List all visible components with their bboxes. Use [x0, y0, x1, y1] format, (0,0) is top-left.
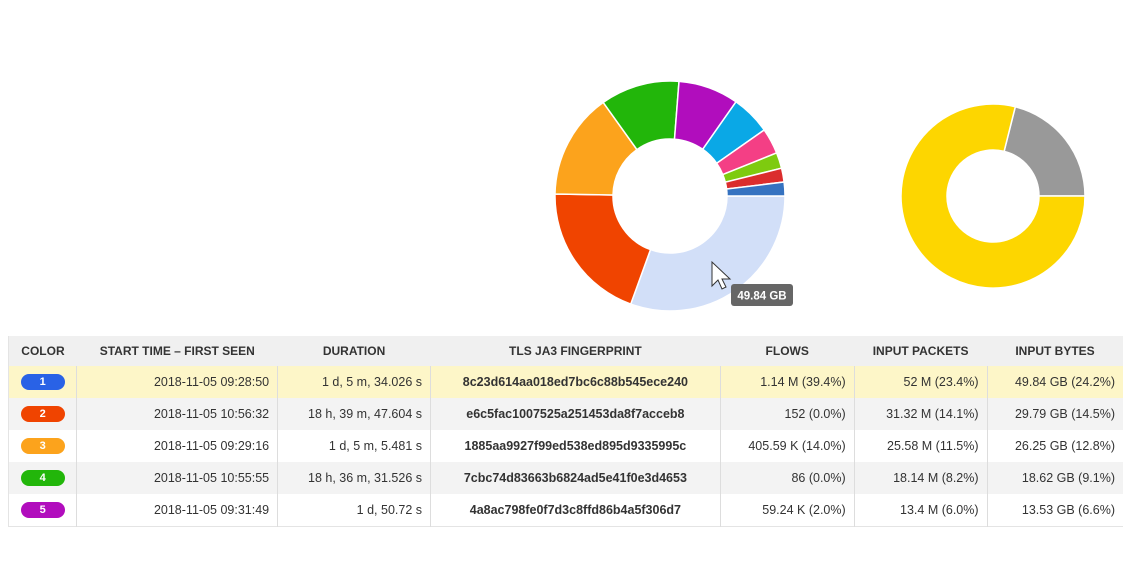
table: 2018-11-05 10:56:32 — [154, 407, 269, 421]
table: 2 — [40, 408, 46, 420]
table: 18.14 M (8.2%) — [893, 471, 979, 485]
table: 1.14 M (39.4%) — [760, 375, 846, 389]
table: 86 (0.0%) — [791, 471, 846, 485]
table: 2018-11-05 09:28:50 — [154, 375, 269, 389]
table: 4 — [40, 472, 46, 484]
table: 1 d, 50.72 s — [357, 503, 422, 517]
table: COLOR — [21, 344, 65, 358]
table: FLOWS — [766, 344, 809, 358]
table — [8, 336, 1123, 527]
table: 1 — [40, 376, 46, 388]
table: INPUT BYTES — [1015, 344, 1095, 358]
table: 31.32 M (14.1%) — [886, 407, 979, 421]
table: 3 — [40, 440, 46, 452]
table: 7cbc74d83663b6824ad5e41f0e3d4653 — [464, 471, 687, 485]
tooltip — [731, 284, 793, 306]
table: 405.59 K (14.0%) — [748, 439, 846, 453]
table: 1 d, 5 m, 5.481 s — [329, 439, 422, 453]
table: 18 h, 36 m, 31.526 s — [308, 471, 422, 485]
table: 18 h, 39 m, 47.604 s — [308, 407, 422, 421]
table: 29.79 GB (14.5%) — [1015, 407, 1115, 421]
tooltip: 49.84 GB — [737, 290, 787, 302]
table: INPUT PACKETS — [873, 344, 968, 358]
table: 49.84 GB (24.2%) — [1015, 375, 1115, 389]
chart: second donut — [902, 104, 1084, 288]
table: 2018-11-05 09:31:49 — [154, 503, 269, 517]
table: 5 — [40, 504, 46, 516]
chart: flows donut — [556, 82, 793, 310]
table: 52 M (23.4%) — [904, 375, 979, 389]
table: 2018-11-05 10:55:55 — [154, 471, 269, 485]
table: START TIME – FIRST SEEN — [100, 344, 255, 358]
table: 152 (0.0%) — [784, 407, 846, 421]
table: 59.24 K (2.0%) — [762, 503, 846, 517]
table: 4a8ac798fe0f7d3c8ffd86b4a5f306d7 — [470, 503, 681, 517]
table: 13.4 M (6.0%) — [900, 503, 979, 517]
table: 8c23d614aa018ed7bc6c88b545ece240 — [463, 375, 688, 389]
table: 26.25 GB (12.8%) — [1015, 439, 1115, 453]
table: TLS JA3 FINGERPRINT — [509, 344, 642, 358]
table: 25.58 M (11.5%) — [887, 439, 979, 453]
table: 2018-11-05 09:29:16 — [154, 439, 269, 453]
table: 1885aa9927f99ed538ed895d9335995c — [465, 439, 686, 453]
icon: cursor — [712, 262, 730, 289]
table: 18.62 GB (9.1%) — [1022, 471, 1115, 485]
table: 1 d, 5 m, 34.026 s — [322, 375, 422, 389]
table: DURATION — [323, 344, 385, 358]
table: e6c5fac1007525a251453da8f7acceb8 — [466, 407, 684, 421]
table: 13.53 GB (6.6%) — [1022, 503, 1115, 517]
